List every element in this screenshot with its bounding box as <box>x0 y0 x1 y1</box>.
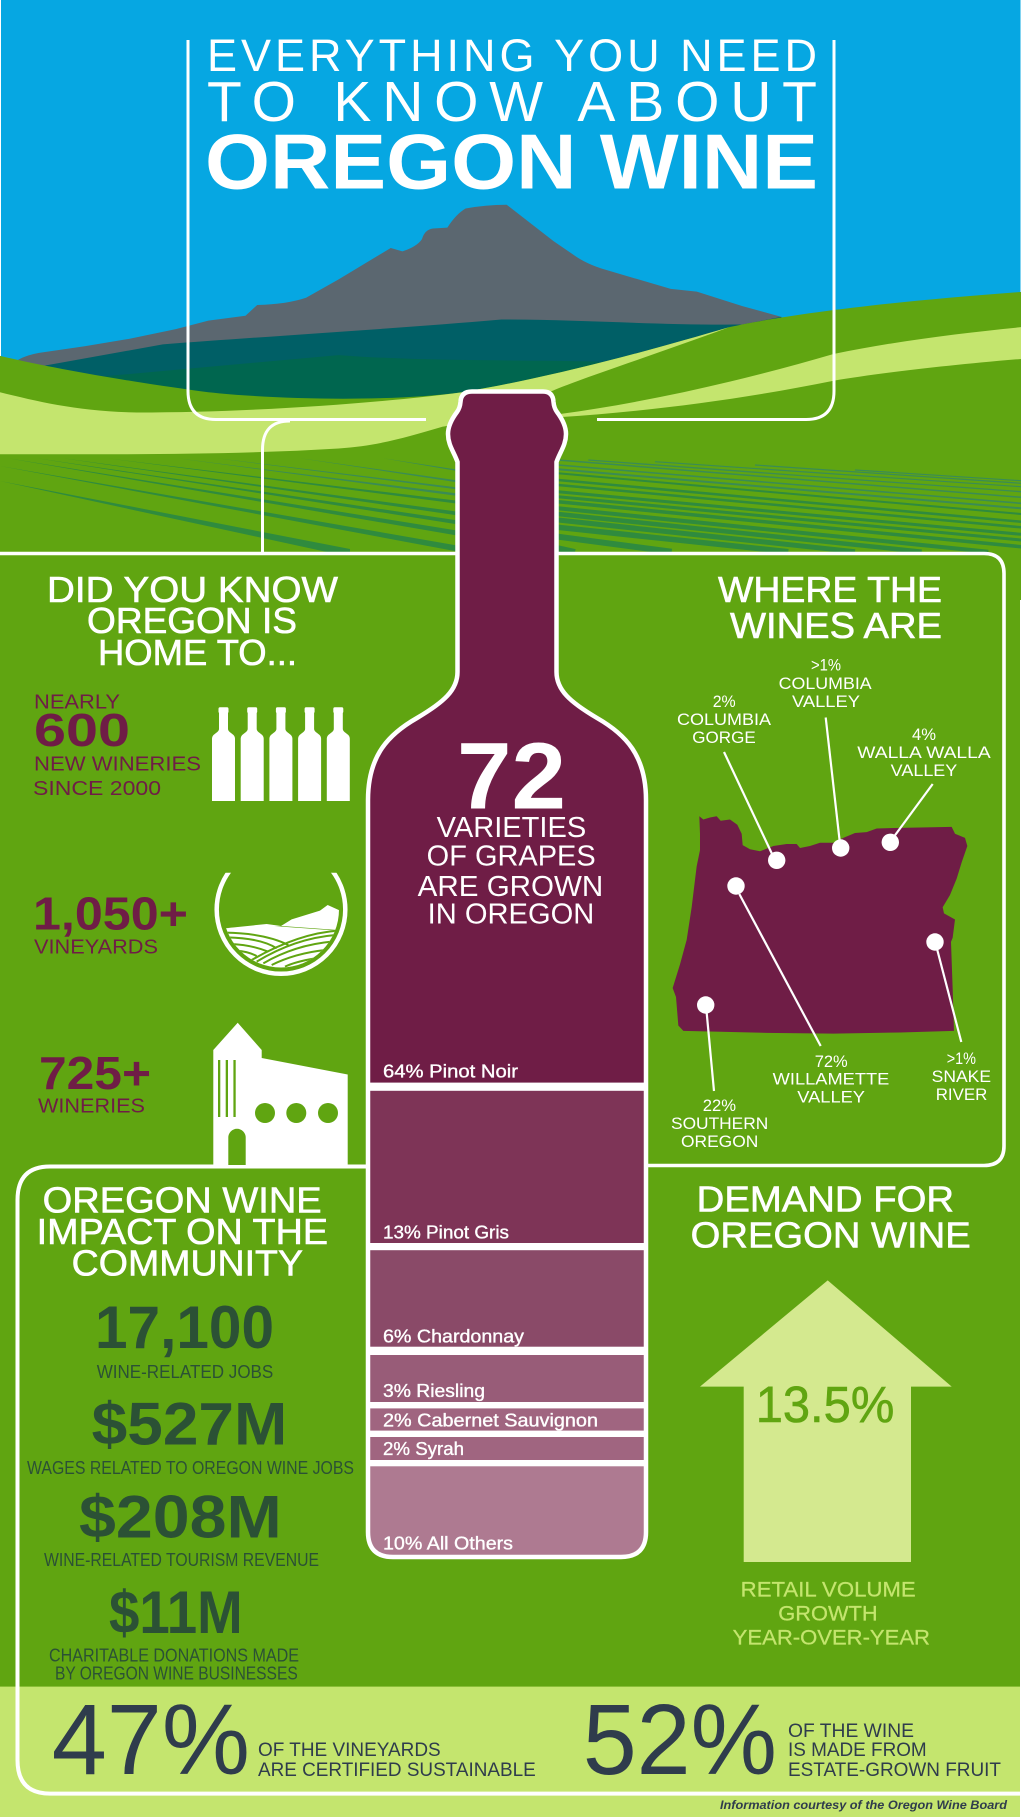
label: walla walla valley: VALLEY <box>891 761 957 780</box>
label: willamette valley <box>773 1052 889 1107</box>
stat: 725+ wineries <box>38 1047 151 1117</box>
caption: retail volume growth: YEAR-OVER-YEAR <box>733 1627 930 1650</box>
title: OREGON WINE <box>205 118 818 206</box>
stat: 72 varieties: ARE GROWN <box>418 871 603 903</box>
panel: did you know <box>33 569 352 1168</box>
label: snake river: >1% <box>947 1049 976 1068</box>
panel: where the wines are <box>671 569 991 1151</box>
vineyard rows left <box>0 458 460 557</box>
label: snake river: RIVER <box>936 1085 987 1104</box>
bottle chart: grape varieties <box>360 385 660 1561</box>
label: columbia gorge: COLUMBIA <box>677 710 772 729</box>
stat: 52% estate-grown: 52% <box>583 1684 777 1796</box>
stat: 600 new wineries: 600 <box>34 704 130 756</box>
stat: 1,050+ vineyards <box>33 888 188 958</box>
landscape scene <box>0 0 1021 600</box>
stat: 13.5%: 13.5% <box>756 1376 894 1433</box>
green hills <box>0 292 1021 600</box>
stat: 47% sustainable: OF THE VINEYARDS <box>258 1739 441 1761</box>
label: columbia valley: COLUMBIA <box>779 674 872 693</box>
stat: 600 new wineries: NEARLY <box>34 692 120 714</box>
source credit: Information courtesy of the Oregon Wine Board <box>720 1800 1008 1812</box>
bottle segment labels: 10% All Others <box>383 1533 513 1553</box>
label: columbia valley: >1% <box>811 656 841 675</box>
heading: did you know: OREGON IS <box>87 600 297 641</box>
caption: retail volume growth: GROWTH <box>778 1603 878 1626</box>
stat: jobs: 17,100 <box>95 1294 274 1361</box>
stat: 47% sustainable: ARE CERTIFIED SUSTAINABLE <box>258 1759 536 1781</box>
map: oregon <box>673 816 967 1034</box>
mountain <box>18 205 781 383</box>
light green band left <box>0 327 729 454</box>
stat: donations: CHARITABLE DONATIONS MADE <box>49 1645 299 1665</box>
stat: donations: BY OREGON WINE BUSINESSES <box>55 1664 298 1684</box>
stat: tourism: WINE-RELATED TOURISM REVENUE <box>44 1550 319 1570</box>
heading: did you know: DID YOU KNOW <box>47 569 338 610</box>
bottle segment labels: 64% Pinot Noir <box>383 1062 518 1082</box>
vineyard rows right <box>558 460 1021 552</box>
panel: community impact <box>27 1179 354 1684</box>
label: walla walla valley <box>857 725 991 780</box>
dark green ridge <box>98 355 599 421</box>
stat: 600 new wineries: SINCE 2000 <box>33 778 161 800</box>
stat: 72 varieties: 72 <box>457 724 566 830</box>
bottle segment labels: 3% Riesling <box>383 1381 485 1401</box>
label: willamette valley: WILLAMETTE <box>773 1070 889 1089</box>
stat: 725+ wineries: 725+ <box>39 1047 151 1099</box>
label: walla walla valley: 4% <box>912 725 936 744</box>
label: columbia gorge <box>677 692 772 747</box>
label: willamette valley: 72% <box>815 1052 848 1071</box>
stat: 52% estate-grown: IS MADE FROM <box>788 1739 927 1761</box>
bottle segment labels <box>383 1062 598 1553</box>
panel frames <box>0 554 1021 1794</box>
stat: 600 new wineries <box>33 692 201 800</box>
arrow: growth <box>700 1280 952 1562</box>
label: columbia gorge: 2% <box>713 692 736 711</box>
stat: 725+ wineries: WINERIES <box>38 1095 145 1117</box>
stat: 52% estate-grown <box>583 1684 1001 1796</box>
bottle segment labels: 6% Chardonnay <box>383 1326 524 1346</box>
heading: community impact: OREGON WINE <box>43 1179 322 1220</box>
stat: 47% sustainable <box>52 1684 536 1796</box>
stat: 1,050+ vineyards: 1,050+ <box>33 888 188 940</box>
hills and mountain <box>0 205 1021 600</box>
heading: did you know <box>47 569 338 673</box>
stat: 52% estate-grown: OF THE WINE <box>788 1720 914 1742</box>
label: columbia valley: VALLEY <box>792 692 860 711</box>
stat: tourism <box>44 1484 319 1570</box>
heading: community impact: COMMUNITY <box>72 1242 303 1283</box>
label: columbia valley <box>779 656 872 711</box>
green background <box>0 553 1020 1687</box>
stat: jobs: WINE-RELATED JOBS <box>97 1362 273 1382</box>
heading: where the wines are <box>718 569 942 646</box>
stat: wages: WAGES RELATED TO OREGON WINE JOBS <box>27 1458 354 1478</box>
stat: donations: $11M <box>109 1579 243 1646</box>
bottle segment labels: 13% Pinot Gris <box>383 1222 509 1242</box>
panel: demand <box>691 1179 971 1650</box>
label: snake river: SNAKE <box>932 1067 991 1086</box>
heading: demand <box>691 1179 971 1255</box>
title frame <box>188 40 834 553</box>
heading: community impact <box>37 1179 328 1283</box>
stat: 47% sustainable: 47% <box>52 1684 250 1796</box>
title: TO KNOW ABOUT <box>207 70 817 134</box>
title <box>205 30 818 206</box>
label: snake river <box>932 1049 991 1104</box>
heading: community impact: IMPACT ON THE <box>37 1211 328 1252</box>
stat: 1,050+ vineyards: VINEYARDS <box>34 936 158 958</box>
light green footer band <box>0 1687 1020 1817</box>
teal ridge <box>39 317 781 421</box>
caption: retail volume growth: RETAIL VOLUME <box>741 1578 916 1601</box>
stat: wages <box>27 1390 354 1478</box>
stat: 52% estate-grown: ESTATE-GROWN FRUIT <box>788 1759 1001 1781</box>
heading: did you know: HOME TO... <box>98 632 297 673</box>
heading: demand: DEMAND FOR <box>697 1179 954 1220</box>
bottle segment labels: 2% Cabernet Sauvignon <box>383 1410 598 1430</box>
title: EVERYTHING YOU NEED <box>207 30 817 81</box>
map dots <box>697 834 944 1014</box>
bottle segment labels: 2% Syrah <box>383 1439 464 1459</box>
label: columbia gorge: GORGE <box>692 728 756 747</box>
sky <box>1 0 1020 556</box>
stat: 72 varieties <box>418 724 603 930</box>
stat: 72 varieties: IN OREGON <box>428 898 594 930</box>
light green band right <box>560 327 1021 417</box>
label: southern oregon <box>671 1096 768 1151</box>
label: southern oregon: OREGON <box>681 1132 758 1151</box>
stat: wages: $527M <box>92 1390 287 1458</box>
icon: five bottles <box>212 707 350 801</box>
stat: 72 varieties: OF GRAPES <box>427 841 596 873</box>
icon: vineyard in wine glass <box>214 872 348 976</box>
label: southern oregon: 22% <box>703 1096 736 1115</box>
label: walla walla valley: WALLA WALLA <box>857 743 991 762</box>
heading: where the wines are: WHERE THE <box>718 569 942 610</box>
caption: retail volume growth <box>733 1578 930 1650</box>
stat: 600 new wineries: NEW WINERIES <box>34 754 201 776</box>
stat: donations <box>49 1579 299 1684</box>
heading: where the wines are: WINES ARE <box>730 605 942 646</box>
label: willamette valley: VALLEY <box>797 1088 865 1107</box>
stat: tourism: $208M <box>79 1484 282 1551</box>
label: southern oregon: SOUTHERN <box>671 1114 768 1133</box>
stat: 72 varieties: VARIETIES <box>437 812 586 844</box>
heading: demand: OREGON WINE <box>691 1214 971 1255</box>
icon: winery building <box>213 1023 348 1168</box>
map leader lines <box>707 718 961 1091</box>
